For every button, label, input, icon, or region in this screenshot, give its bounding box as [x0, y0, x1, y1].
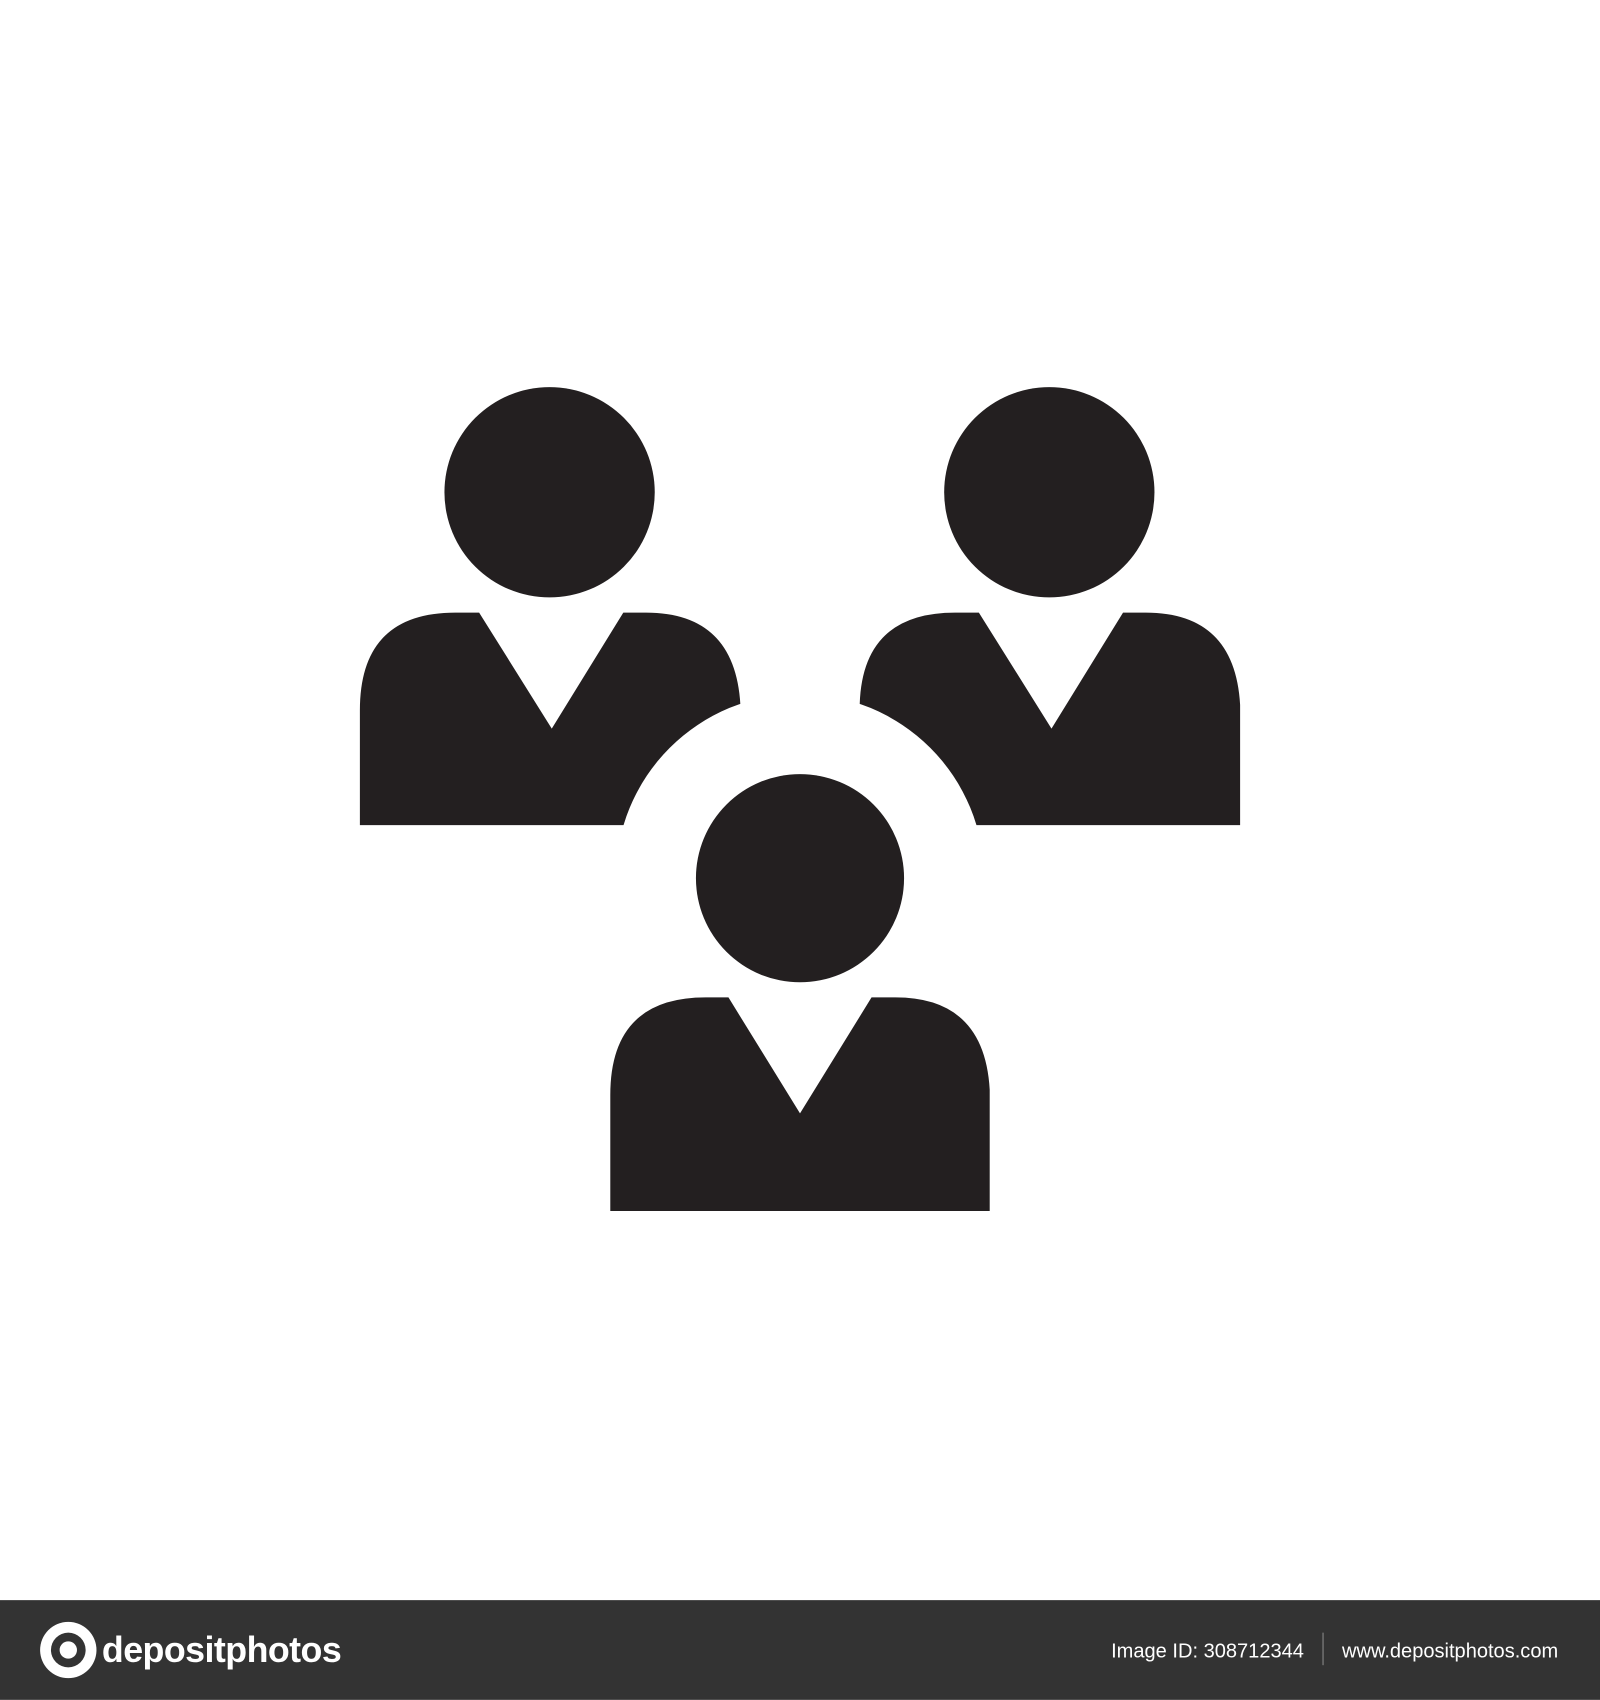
icon: logo: [40, 1622, 96, 1678]
image id: Image ID: 308712344: [1111, 1641, 1304, 1663]
cutout circle: [616, 694, 984, 1062]
logo text: depositphotos: [102, 1630, 341, 1670]
website: www.depositphotos.com: [1341, 1641, 1558, 1663]
icon: person left: [360, 387, 740, 825]
footer bar: [0, 1600, 1600, 1700]
icon: person right: [860, 387, 1240, 825]
icon: person bottom center: [610, 774, 990, 1211]
